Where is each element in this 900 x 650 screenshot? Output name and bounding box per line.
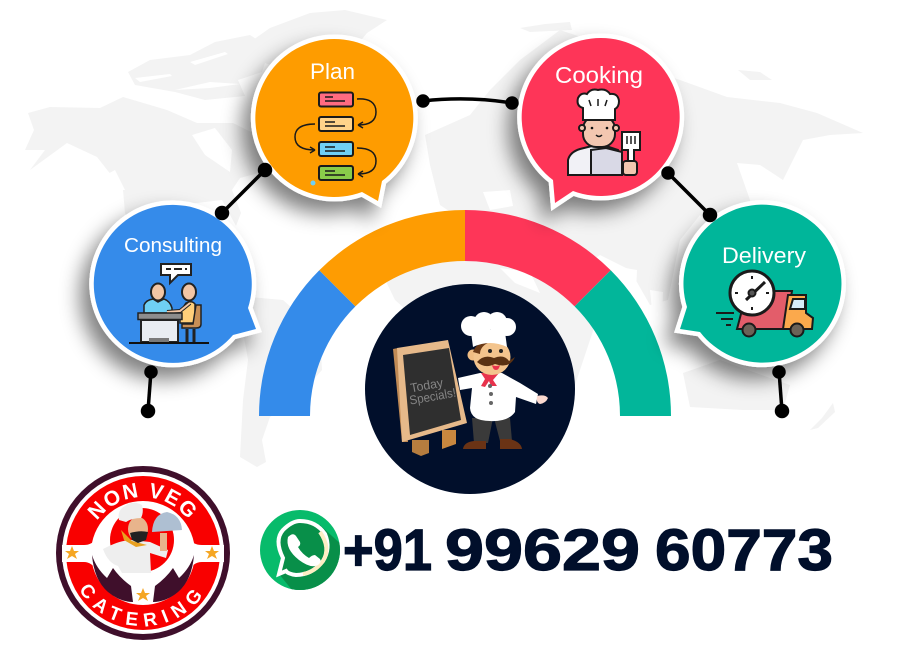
logo: non veg catering [56,466,230,640]
phone number: 99629 [445,518,640,583]
background world map [25,10,863,467]
text: catering: CATERING [81,584,201,627]
icon: chef [458,312,548,449]
phone number [343,518,833,583]
label: delivery: Delivery [722,243,806,268]
text: today specials: Today [409,376,445,395]
connector: delivery stem [774,367,788,416]
label: plan: Plan [310,59,355,84]
text: non veg: NON VEG [87,482,196,520]
icon: flow chart [295,92,376,186]
text: today specials [406,374,457,408]
panel: cooking bubble [522,38,680,203]
icon: two people at desk [129,264,209,344]
label: cooking: Cooking [555,62,643,88]
panel: delivery bubble [680,205,841,363]
connector: plan to consulting [216,164,270,218]
icon: logo chef with platter [103,503,182,573]
panel: consulting bubble [94,205,256,363]
connector: cooking to delivery [663,168,716,220]
icon: cupped hands [92,555,194,602]
phone number: +91 [343,518,432,583]
icon: whatsapp [260,510,345,590]
connector: plan to cooking [418,96,517,108]
icon: stars [65,546,219,601]
label: consulting: Consulting [124,235,222,257]
panel: plan bubble [255,39,413,201]
semicircular gauge [259,210,671,416]
icon: delivery truck and clock [716,271,813,336]
connector: consulting stem [142,367,156,416]
phone number: 60773 [655,518,833,583]
central chef circle [365,284,575,494]
icon: cook with spatula [568,90,640,175]
text: today specials: Specials! [408,386,457,408]
icon: specials board [393,340,467,456]
